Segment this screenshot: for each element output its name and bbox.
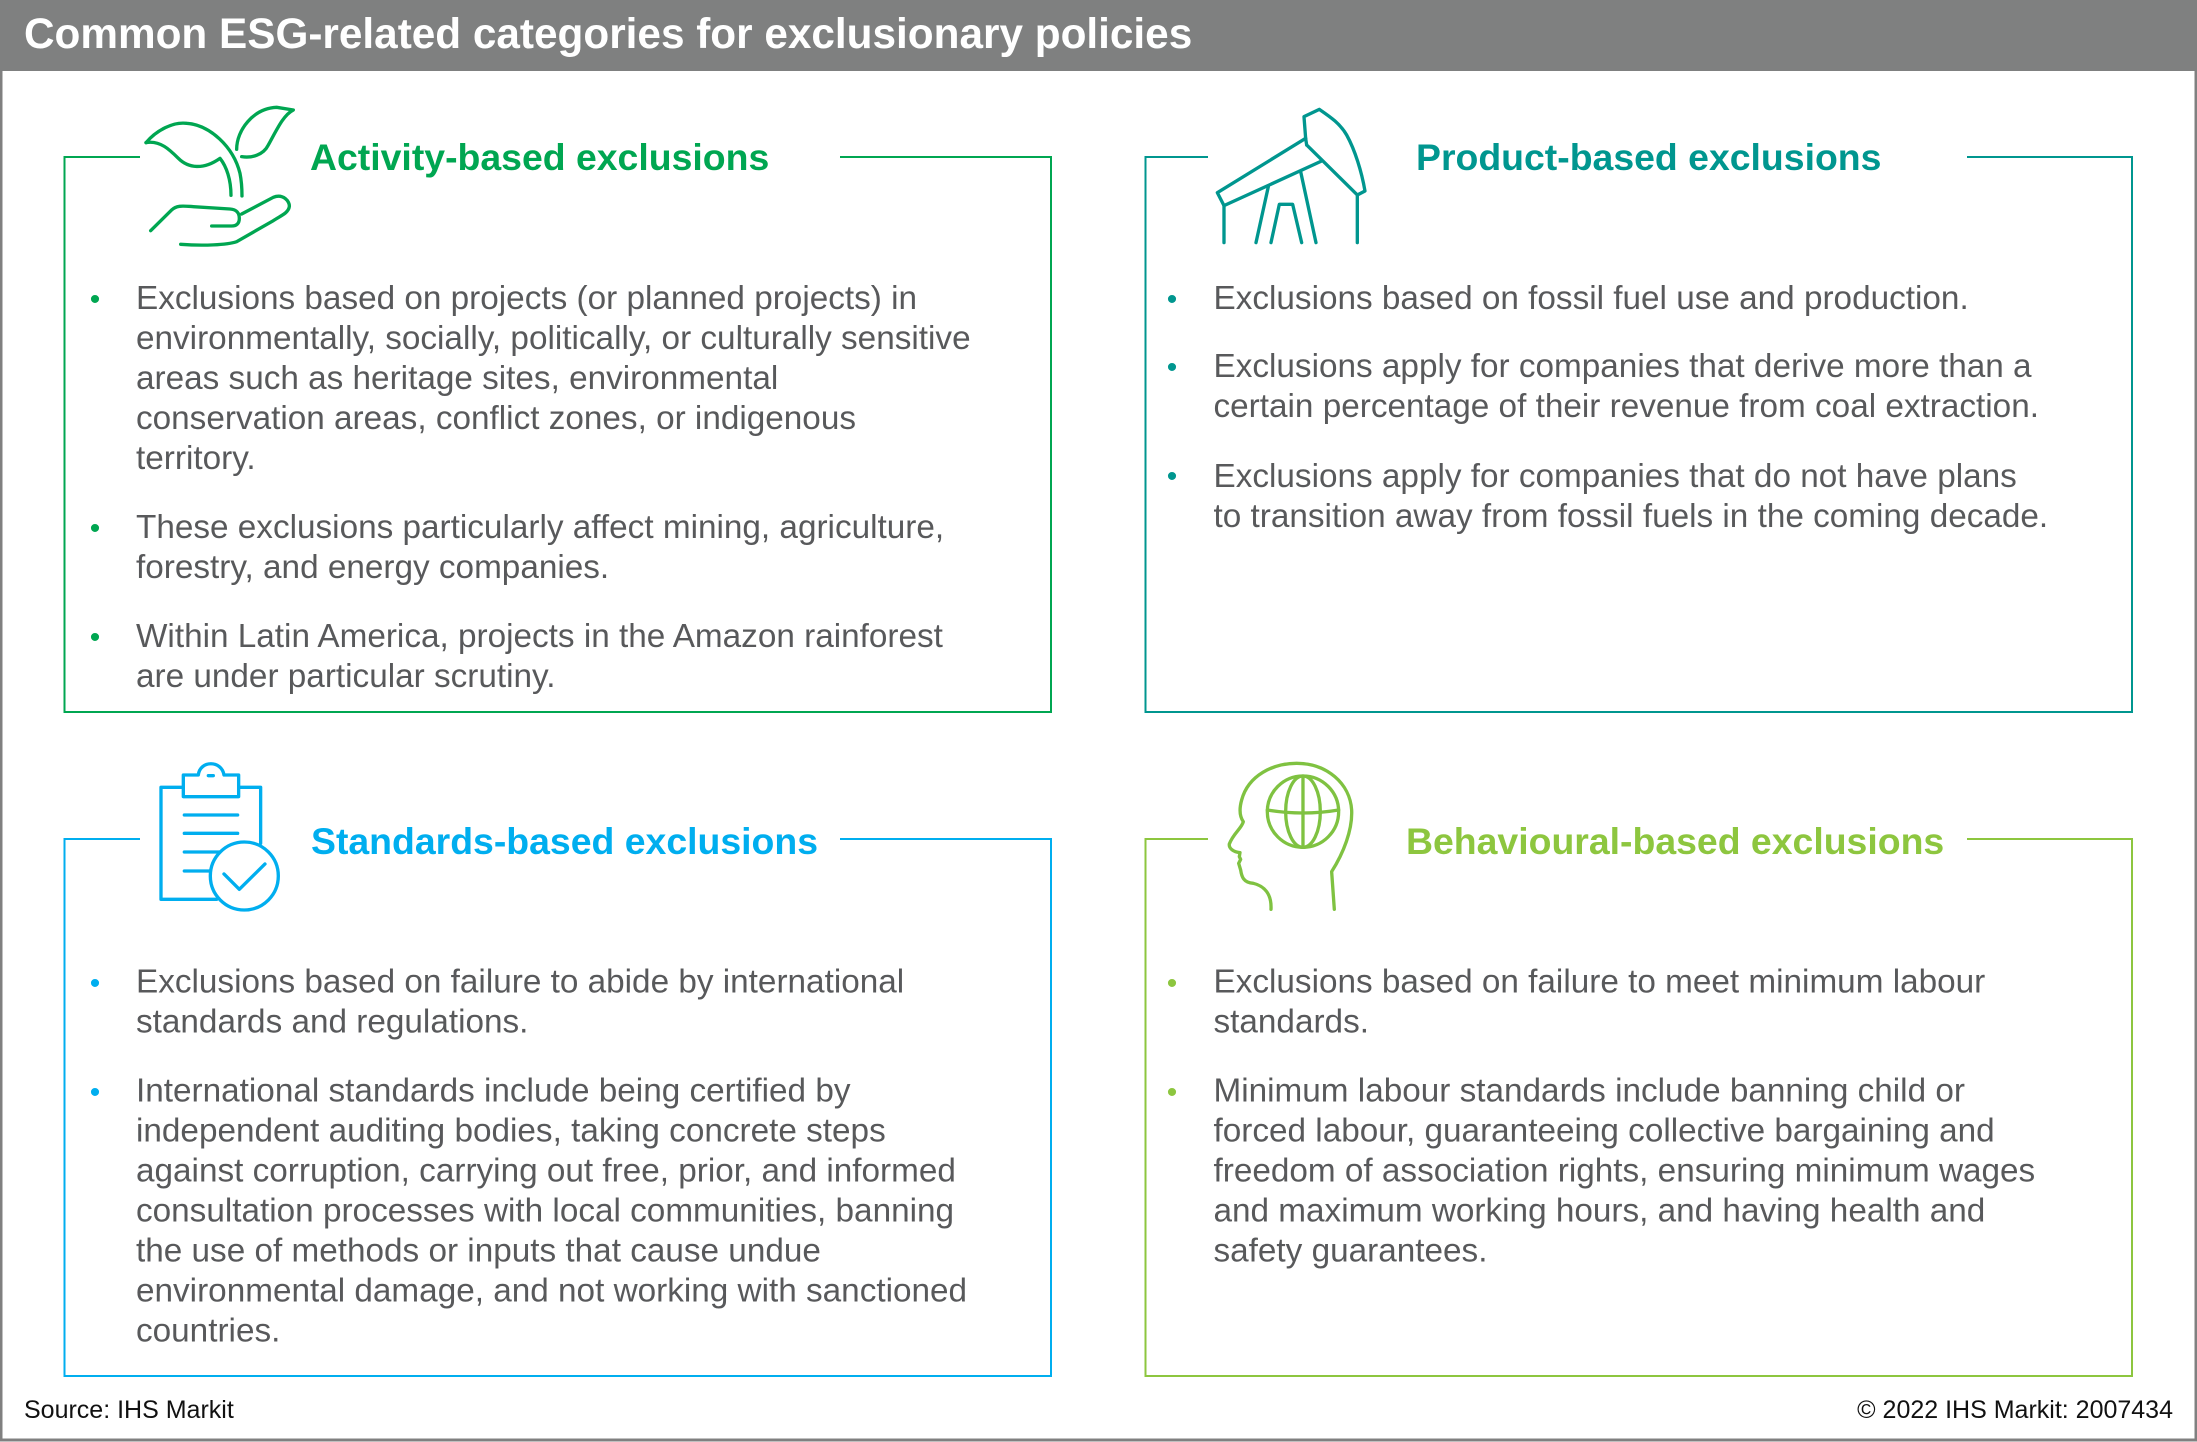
bullet list: behavioural-based: • — [1167, 967, 1177, 1000]
bullet list: product-based: Exclusions apply for companies that do not have plans — [1214, 458, 2017, 495]
bullet list: standards-based: International standards include being certified by — [136, 1072, 851, 1110]
bullet list: behavioural-based: Exclusions based on failure to meet minimum labour — [1214, 964, 1985, 1000]
bullet list: product-based: Exclusions apply for companies that derive more than a — [1214, 348, 2032, 385]
bullet list: standards-based: • — [90, 1076, 100, 1109]
bullet list: activity-based: are under particular scrutiny. — [136, 658, 555, 695]
bullet list: product-based: • — [1167, 351, 1177, 384]
bullet list: product-based — [1167, 280, 2048, 535]
title banner: Common ESG-related categories for exclusionary policies — [24, 10, 1192, 57]
panel: product-based exclusions — [1146, 109, 2132, 712]
panel: standards-based exclusions — [64, 764, 1051, 1376]
bullet list: activity-based: environmentally, socially, politically, or culturally sensitive — [136, 320, 971, 357]
bullet list: standards-based: the use of methods or inputs that cause undue — [136, 1232, 821, 1270]
bullet list: activity-based: • — [90, 512, 100, 545]
title banner — [0, 0, 2197, 71]
bullet list: behavioural-based: and maximum working hours, and having health and — [1214, 1192, 1985, 1230]
icon: head with globe — [1229, 763, 1352, 909]
heading: behavioural-based: Behavioural-based exclusions — [1406, 820, 1944, 862]
bullet list: product-based: certain percentage of their revenue from coal extraction. — [1214, 388, 2039, 425]
bullet list: activity-based: Within Latin America, projects in the Amazon rainforest — [136, 618, 943, 655]
bullet list: behavioural-based: • — [1167, 1076, 1177, 1109]
heading: standards-based: Standards-based exclusions — [311, 820, 818, 862]
panel: activity-based exclusions — [64, 107, 1051, 712]
bullet list: product-based: • — [1167, 283, 1177, 316]
bullet list: activity-based: • — [90, 621, 100, 654]
bullet list: standards-based: standards and regulations. — [136, 1004, 528, 1040]
bullet list: activity-based: These exclusions particularly affect mining, agriculture, — [136, 509, 944, 546]
bullet list: activity-based: territory. — [136, 440, 256, 477]
icon: plant in hand — [146, 107, 293, 245]
bullet list: standards-based: environmental damage, and not working with sanctioned — [136, 1272, 967, 1310]
bullet list: standards-based: countries. — [136, 1312, 280, 1350]
panel: behavioural-based exclusions — [1146, 763, 2132, 1376]
bullet list: standards-based: Exclusions based on failure to abide by international — [136, 964, 904, 1000]
bullet list: activity-based: areas such as heritage sites, environmental — [136, 360, 778, 397]
bullet list: activity-based — [90, 280, 971, 695]
bullet list: standards-based: • — [90, 967, 100, 1000]
bullet list: standards-based: consultation processes with local communities, banning — [136, 1192, 954, 1230]
bullet list: behavioural-based — [1167, 964, 2035, 1270]
bullet list: behavioural-based: freedom of association rights, ensuring minimum wages — [1214, 1152, 2035, 1190]
bullet list: activity-based: • — [90, 283, 100, 316]
bullet list: standards-based: independent auditing bodies, taking concrete steps — [136, 1112, 886, 1150]
bullet list: activity-based: conservation areas, conflict zones, or indigenous — [136, 400, 856, 437]
heading: product-based: Product-based exclusions — [1416, 136, 1881, 178]
bullet list: behavioural-based: Minimum labour standards include banning child or — [1214, 1072, 1965, 1110]
icon: clipboard with check — [161, 764, 278, 910]
bullet list: standards-based — [90, 964, 967, 1350]
bullet list: standards-based: against corruption, carrying out free, prior, and informed — [136, 1152, 956, 1190]
bullet list: behavioural-based: forced labour, guaranteeing collective bargaining and — [1214, 1112, 1995, 1150]
heading: activity-based: Activity-based exclusions — [310, 136, 769, 178]
copyright note: © 2022 IHS Markit: 2007434 — [1857, 1396, 2173, 1424]
icon: oil pump jack — [1217, 109, 1365, 243]
source note: Source: IHS Markit — [24, 1396, 234, 1424]
bullet list: product-based: to transition away from fossil fuels in the coming decade. — [1214, 498, 2048, 535]
bullet list: product-based: Exclusions based on fossil fuel use and production. — [1214, 280, 1969, 317]
bullet list: behavioural-based: standards. — [1214, 1004, 1369, 1040]
bullet list: product-based: • — [1167, 460, 1177, 493]
bullet list: activity-based: Exclusions based on projects (or planned projects) in — [136, 280, 917, 317]
bullet list: behavioural-based: safety guarantees. — [1214, 1232, 1487, 1270]
bullet list: activity-based: forestry, and energy companies. — [136, 549, 609, 586]
